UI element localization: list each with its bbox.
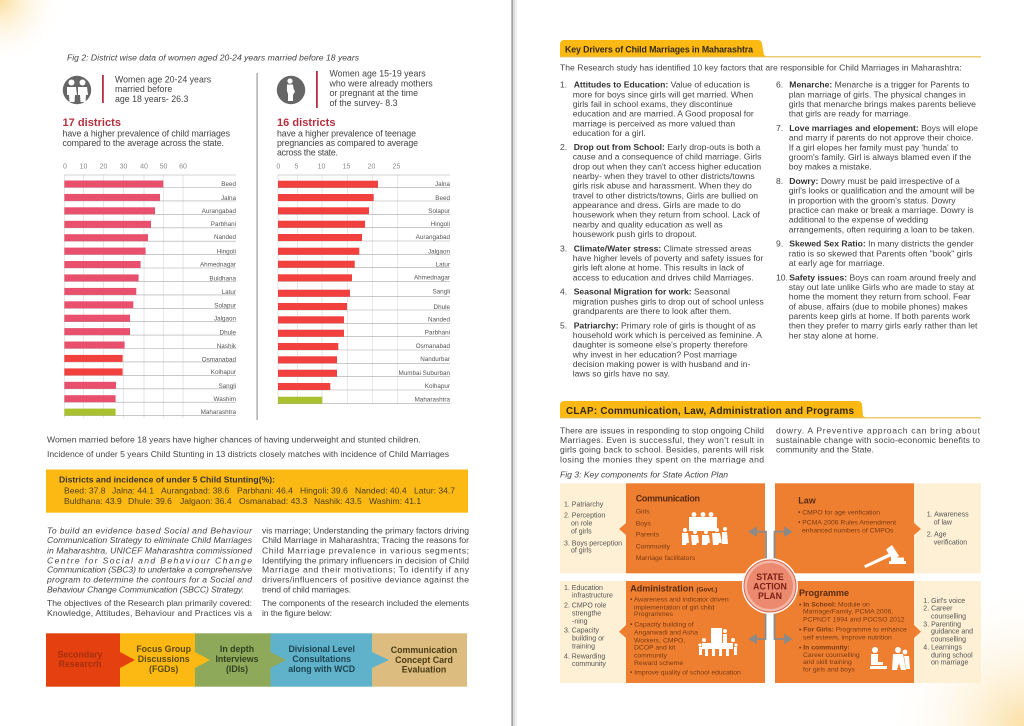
step: divisional consultations: along with WCD bbox=[288, 664, 355, 674]
list: key drivers 1-5: girls risk abuse and harassment. When they do bbox=[573, 181, 752, 191]
list: key drivers 1-5: education for a girl. bbox=[573, 128, 646, 138]
list: key drivers 6-10: 6. bbox=[776, 80, 783, 90]
callout: stunting by district: Nanded: 40.4 bbox=[355, 485, 407, 495]
panel: administration: Reward scheme bbox=[634, 660, 683, 667]
bar chart: child marriage by district: Maharashtra bbox=[201, 409, 236, 416]
list: key drivers 1-5: grandparents are there to look after them. bbox=[573, 306, 731, 316]
panel: programme: 2. Career bbox=[923, 606, 953, 613]
list: key drivers 1-5: more for boys since girls will get married. When bbox=[573, 89, 753, 99]
badge: state action plan: ACTION bbox=[753, 582, 787, 592]
step: divisional consultations: Consultations bbox=[292, 654, 351, 664]
bar chart: child marriage by district: Washim bbox=[213, 396, 236, 403]
bar chart: teenage pregnancy by district: Ahmednagar bbox=[414, 274, 450, 282]
process flow: research components bbox=[46, 633, 467, 687]
badge: state action plan: STATE bbox=[756, 572, 784, 582]
text block: CLAP intro right: sustainable change with socio-economic benefits to bbox=[776, 435, 980, 445]
list: key drivers 6-10: girls that menarche brings makes parents believe bbox=[789, 99, 976, 109]
panel: programme: • In School: Module on bbox=[799, 602, 870, 609]
panel: law: Law bbox=[798, 495, 817, 505]
intro text: key factors: The Research study has identified 10 key factors that are responsible for Child Marriages in Maharashtra: bbox=[560, 62, 962, 72]
text block: CLAP intro left: losing the monies they spent on the marriage and bbox=[560, 454, 764, 464]
list: key drivers 1-5: education and are married. A Good proposal for bbox=[573, 109, 754, 119]
list: key drivers 6-10: parents keep girls at home. If both parents work bbox=[789, 311, 971, 321]
list: key drivers 6-10: Menarche: Menarche is a trigger for Parents to bbox=[789, 80, 970, 90]
panel: law: • CMPO for age verification bbox=[798, 510, 880, 517]
bar chart: teenage pregnancy by district: Parbhani bbox=[425, 330, 450, 336]
bar chart: child marriage by district: Latur bbox=[222, 289, 236, 296]
bar chart: child marriage by district: Aurangabad bbox=[202, 208, 236, 215]
text block: research strategy right column: Child Marriage prevalence in various segments; bbox=[262, 545, 469, 555]
text block: research strategy left column: The objectives of the Research plan primarily covered: bbox=[47, 598, 252, 608]
stat block: teenage mothers: who were already mothers bbox=[328, 79, 433, 89]
panel: administration: building or bbox=[572, 635, 605, 642]
panel: administration: 2. CMPO role bbox=[564, 603, 607, 610]
bar chart: child marriage by district: Hingoli bbox=[217, 248, 236, 256]
panel: programme: on marriage bbox=[931, 660, 968, 667]
panel: programme: counselling bbox=[931, 637, 966, 644]
list: key drivers 6-10: boy makes a mistake. bbox=[789, 162, 872, 172]
list: key drivers 6-10: 8. bbox=[776, 176, 783, 186]
panel: administration: infrastructure bbox=[572, 593, 613, 600]
list: key drivers 6-10: 7. bbox=[776, 123, 783, 133]
text block: research strategy left column bbox=[46, 525, 253, 618]
bar chart: teenage pregnancy by district: Kolhapur bbox=[425, 383, 450, 390]
bar chart: teenage pregnancy by district: 0 bbox=[276, 164, 280, 171]
text block: CLAP intro right: community and the State. bbox=[776, 445, 874, 455]
text block: research strategy right column: Marriage and their motivations; To identify if any bbox=[262, 565, 470, 575]
text block: CLAP intro left: There are issues in responding to stop ongoing Child bbox=[560, 425, 764, 435]
bar chart: teenage pregnancy by district: Hingoli bbox=[431, 221, 450, 228]
step: concept card evaluation: Communication bbox=[391, 645, 457, 655]
panel: programme: and skill training bbox=[803, 659, 852, 666]
bar chart: teenage pregnancy by district: 15 bbox=[343, 164, 350, 171]
icon: gavel bbox=[864, 545, 906, 568]
panel: programme: self esteem, improve nutrition bbox=[803, 634, 892, 641]
list: key drivers 1-5: 2. bbox=[560, 142, 567, 152]
bar chart: teenage pregnancy by district: Aurangabad bbox=[416, 234, 450, 241]
bar chart: teenage pregnancy by district bbox=[276, 164, 450, 404]
heading: 17 districts: have a higher prevalence of child marriages bbox=[62, 129, 231, 139]
bar chart: teenage pregnancy by district: Beed bbox=[435, 195, 450, 202]
text block: research strategy right column bbox=[262, 525, 470, 618]
step: in depth interviews: (IDIs) bbox=[226, 664, 248, 674]
text block: research strategy right column: The components of the research included the elements bbox=[262, 598, 469, 608]
list: key drivers 1-5: cause and a consequence of child marriage. Girls bbox=[573, 152, 761, 162]
panel: programme: counselling bbox=[931, 613, 966, 620]
list: key drivers 1-5: girls left alone at home. This results in lack of bbox=[573, 263, 745, 273]
panel: administration: Anganwadi and Asha bbox=[634, 630, 698, 637]
text block: research strategy left column: Communication Strategy to eliminate Child Marriages bbox=[47, 535, 253, 545]
list: key drivers 1-5: appearance and dress. Girls are made to do bbox=[573, 200, 741, 210]
panel: law: verification bbox=[934, 540, 967, 547]
text block: research strategy left column: Communication (SBC3) to undertake a comprehensive bbox=[47, 565, 252, 575]
text block: research strategy left column: Knowledge, Attitudes, Behaviour and Practices vis a bbox=[47, 608, 252, 618]
panel: programme: Career counselling bbox=[803, 652, 860, 659]
text block: research strategy left column: in Maharashtra, UNICEF Maharashtra commissioned bbox=[47, 545, 252, 555]
list: key drivers 6-10: plan marriage of girls. The physical changes in bbox=[789, 89, 966, 99]
panel: administration: DCOP and kit bbox=[634, 645, 676, 652]
stat block: women married before 18: married before bbox=[115, 84, 172, 94]
panel: communication: Marriage facilitators bbox=[636, 555, 696, 562]
list: key drivers 1-5: daughter is someone else's property therefore bbox=[573, 340, 748, 350]
bar chart: teenage pregnancy by district: Sangli bbox=[432, 288, 450, 296]
icon: administration meeting bbox=[698, 628, 738, 656]
panel: administration: Programmes bbox=[634, 611, 674, 618]
callout: stunting by district: Parbhani: 46.4 bbox=[237, 485, 293, 495]
bar chart: child marriage by district: Parbhani bbox=[211, 221, 236, 228]
list: key drivers 1-5: laws so girls have no say. bbox=[573, 369, 670, 379]
text block: research strategy left column: Behaviour Change Communication (SBCC) Strategy. bbox=[47, 584, 244, 594]
list: key drivers 1-5: Attitudes to Education: Value of education is bbox=[574, 80, 750, 90]
text block: CLAP intro left bbox=[560, 425, 765, 464]
list: key drivers 6-10: 9. bbox=[776, 239, 783, 249]
list: key drivers 6-10: and marry if parents do not approve their choice. bbox=[789, 133, 974, 143]
heading: 16 districts: 16 districts bbox=[277, 117, 336, 129]
bar chart: teenage pregnancy by district: 25 bbox=[393, 164, 400, 171]
callout: stunting by district: Jalna: 44.1 bbox=[112, 485, 154, 495]
panel: programme: during school bbox=[931, 652, 973, 659]
panel: programme: • In community: bbox=[799, 644, 850, 651]
step: secondary research bbox=[58, 650, 103, 669]
bar chart: child marriage by district: Kolhapur bbox=[211, 369, 236, 376]
callout: stunting by district bbox=[46, 470, 468, 513]
icon: training group bbox=[870, 647, 910, 670]
bar chart: teenage pregnancy by district: 5 bbox=[295, 164, 299, 171]
panel: communication: on role bbox=[571, 520, 593, 528]
panel: communication: Parents bbox=[636, 532, 660, 539]
list: key drivers 6-10: of abuse, affairs (due to mobile phones) makes bbox=[789, 301, 968, 311]
panel: law bbox=[775, 483, 981, 573]
bar chart: child marriage by district: 10 bbox=[80, 164, 87, 171]
badge: state action plan bbox=[742, 558, 798, 614]
panel: administration: implementation of girl child bbox=[634, 605, 715, 612]
panel: communication: of girls bbox=[571, 548, 592, 555]
panel: administration: • Awareness and indicator driven bbox=[630, 597, 729, 604]
panel: administration bbox=[560, 581, 765, 683]
heading: 16 districts: have a higher prevalence of teenage bbox=[277, 129, 416, 139]
list: key drivers 6-10: arrangements, often requiring a loan to be taken. bbox=[789, 224, 975, 234]
stat block: women married before 18: Women age 20-24 years bbox=[115, 75, 212, 85]
list: key drivers 1-5: migration pushes girls to drop out of school unless bbox=[573, 296, 764, 306]
panel: programme: 1. Girl's voice bbox=[923, 598, 965, 605]
text block: research strategy right column: drivers/influencers of positive deviance against the bbox=[262, 575, 469, 585]
bar chart: child marriage by district: Nashik bbox=[217, 343, 237, 350]
panel: communication: Girls bbox=[636, 509, 650, 516]
section tab: key drivers bbox=[560, 40, 981, 57]
text block: stunting statement bbox=[47, 434, 449, 459]
heading: 16 districts bbox=[277, 117, 418, 158]
bar chart: child marriage by district: Buldhana bbox=[209, 276, 236, 282]
bar chart: child marriage by district: 30 bbox=[120, 164, 127, 171]
panel: communication: 3. Boys perception bbox=[564, 540, 622, 547]
icon: pregnant girl bbox=[277, 76, 305, 104]
list: key drivers 1-5: girls fail in school exams, they discontinue bbox=[573, 99, 733, 109]
step: focus group discussions bbox=[136, 644, 192, 674]
list: key drivers 6-10: ratio is so skewed that Parents often "book" girls bbox=[789, 248, 972, 258]
heading: 17 districts: 17 districts bbox=[62, 117, 121, 129]
heading: 17 districts bbox=[62, 117, 231, 148]
list: key drivers 1-5: have higher levels of poverty and safety issues for bbox=[573, 253, 763, 263]
list: key drivers 6-10: groom's family. Girl is always blamed even if the bbox=[789, 152, 971, 162]
panel: communication: Boys bbox=[636, 520, 651, 527]
panel: administration: Workers, CMPO, bbox=[634, 637, 685, 644]
bar chart: teenage pregnancy by district: Maharashtra bbox=[415, 396, 450, 404]
bar chart: child marriage by district: 40 bbox=[140, 164, 148, 171]
callout: stunting by district: Districts and incidence of under 5 Child Stunting(%): bbox=[59, 475, 275, 485]
list: key drivers 1-5: Patriarchy: Primary role of girls is thought of as bbox=[574, 320, 756, 330]
text block: CLAP intro right bbox=[776, 425, 981, 455]
panel: programme: guidance and bbox=[931, 629, 973, 636]
panel: communication: of girls bbox=[571, 529, 592, 536]
list: key drivers 6-10: then they prefer to marry girls early rather than let bbox=[789, 321, 978, 331]
bar chart: child marriage by district: 50 bbox=[160, 164, 167, 171]
panel: administration: strengthe bbox=[572, 610, 601, 617]
list: key drivers 1-5: 3. bbox=[560, 243, 567, 253]
panel: law: of law bbox=[934, 519, 953, 526]
text block: CLAP intro right: dowry. A Preventive approach can bring about bbox=[776, 425, 981, 435]
list: key drivers 6-10: stay out late unlike Girls who are made to stay at bbox=[789, 282, 975, 292]
panel: communication: 2. Perception bbox=[564, 513, 605, 520]
bar chart: child marriage by district: 20 bbox=[100, 164, 107, 171]
list: key drivers 6-10: at early age for marriage. bbox=[789, 258, 885, 268]
step: concept card evaluation bbox=[391, 645, 457, 674]
list: key drivers 6-10: that girls are ready for marriage. bbox=[789, 109, 911, 119]
list: key drivers 1-5: 5. bbox=[560, 320, 567, 330]
panel: programme: 3. Parenting bbox=[923, 621, 961, 628]
list: key drivers 1-5: 4. bbox=[560, 287, 567, 297]
callout: stunting by district: Dhule: 39.6 bbox=[128, 496, 172, 506]
list: key drivers 1-5: drop out when they can't access higher education bbox=[573, 161, 761, 171]
list: key drivers 1-5: why invest in her education? Post marriage bbox=[572, 349, 737, 359]
bar chart: child marriage by district: Nanded bbox=[214, 234, 236, 241]
list: key drivers 6-10: Love marriages and elopement: Boys will elope bbox=[789, 123, 978, 133]
bar chart: teenage pregnancy by district: Solapur bbox=[428, 208, 450, 215]
panel: administration: -ning bbox=[572, 618, 588, 625]
list: key drivers 1-5: Seasonal Migration for work: Seasonal bbox=[574, 287, 730, 297]
panel: law: • PCMA 2006 Rules Amendment bbox=[798, 520, 896, 527]
list: key drivers 6-10: additional to the expense of wedding bbox=[789, 215, 928, 225]
figure caption: Fig 3: Fig 3: Key components for State Action Plan bbox=[560, 470, 728, 480]
callout: stunting by district: Latur: 34.7 bbox=[414, 485, 455, 495]
panel: programme: PCPNDT 1994 and POCSO 2012 bbox=[803, 617, 905, 624]
list: key drivers 6-10: Skewed Sex Ratio: In many districts the gender bbox=[789, 239, 974, 249]
step: in depth interviews: In depth bbox=[220, 644, 254, 654]
step: in depth interviews bbox=[215, 644, 259, 674]
list: key drivers 6-10: If a girl elopes her family must pay 'hunda' to bbox=[789, 142, 958, 152]
step: concept card evaluation: Evaluation bbox=[402, 664, 446, 674]
list: key drivers 1-5: access to education and drives child Marriages. bbox=[573, 272, 754, 282]
step: secondary research: Researcrh bbox=[58, 659, 102, 669]
step: divisional consultations bbox=[288, 644, 355, 674]
panel: programme: Marriage/Family, PCMA 2006, bbox=[803, 609, 893, 616]
step: focus group discussions: (FGDs) bbox=[149, 664, 178, 674]
bar chart: teenage pregnancy by district: Nanded bbox=[428, 316, 450, 324]
panel: programme: • For Girls: Programme to enhance bbox=[799, 627, 907, 634]
callout: stunting by district: Beed: 37.8 bbox=[64, 485, 106, 495]
list: key drivers 6-10: home the moment they return from school. Fear bbox=[789, 292, 971, 302]
list: key drivers 6-10: 10. bbox=[776, 272, 788, 282]
badge: state action plan: PLAN bbox=[758, 591, 782, 601]
panel: administration: community bbox=[572, 661, 606, 668]
step: secondary research: Secondary bbox=[58, 650, 103, 660]
list: key drivers 1-5: decision making power is with husband and in- bbox=[573, 359, 751, 369]
text block: research strategy left column: To build an evidence based Social and Behaviour bbox=[47, 525, 253, 535]
panel: programme bbox=[775, 581, 981, 683]
panel: programme: for girls and boys bbox=[803, 666, 855, 673]
section tab: key drivers: Key Drivers of Child Marriages in Maharashtra bbox=[565, 44, 753, 54]
text block: research strategy right column: vis marriage; Understanding the primary factors driving bbox=[262, 525, 469, 535]
callout: stunting by district: Hingoli: 39.6 bbox=[300, 485, 348, 495]
panel: communication: 1. Patriarchy bbox=[564, 501, 604, 508]
icon: meeting group bbox=[682, 512, 728, 545]
bar chart: child marriage by district: Solapur bbox=[214, 302, 236, 310]
bar chart: child marriage by district: Jalna bbox=[221, 195, 236, 202]
stat block: teenage mothers bbox=[277, 69, 433, 108]
list: key drivers 1-5: nearby and quality education as well as bbox=[573, 219, 723, 229]
panel: law: enhanced numbers of CMPOs bbox=[802, 528, 894, 535]
panel: communication bbox=[560, 483, 765, 573]
step: focus group discussions: Focus Group bbox=[136, 644, 192, 654]
callout: stunting by district: Jalgaon: 36.4 bbox=[180, 496, 232, 506]
stat block: teenage mothers: of the survey- 8.3 bbox=[330, 98, 398, 108]
bar chart: child marriage by district: 60 bbox=[179, 164, 187, 171]
step: concept card evaluation: Concept Card bbox=[395, 655, 453, 665]
list: key drivers 1-5 bbox=[560, 80, 764, 379]
list: key drivers 6-10 bbox=[776, 80, 978, 340]
text block: stunting statement: Women married before 18 years have higher chances of having underweight and stunted children. bbox=[47, 434, 421, 444]
bar chart: child marriage by district: Jalgaon bbox=[214, 316, 236, 322]
callout: stunting by district: Osmanabad: 43.3 bbox=[239, 496, 308, 506]
text block: research strategy right column: trend of child marriages. bbox=[262, 584, 351, 594]
list: key drivers 6-10: in proportion with the groom's status. Dowry bbox=[789, 195, 956, 205]
text block: CLAP intro left: Marriages. Even is successful, they won't result in bbox=[560, 435, 764, 445]
step: divisional consultations: Divisional Level bbox=[288, 644, 355, 654]
callout: stunting by district: Buldhana: 43.9 bbox=[64, 496, 122, 506]
bar chart: teenage pregnancy by district: Nandurbar bbox=[420, 356, 450, 363]
bar chart: teenage pregnancy by district: Mumbai Suburban bbox=[399, 370, 450, 377]
list: key drivers 1-5: travel to other districts/towns, Girls are bullied on bbox=[573, 190, 758, 200]
bar chart: child marriage by district bbox=[63, 164, 237, 418]
bar chart: child marriage by district: Beed bbox=[221, 181, 236, 188]
callout: stunting by district: Aurangabad: 38.6 bbox=[161, 485, 230, 495]
list: key drivers 1-5: household work which is perceived as feminine. A bbox=[573, 330, 762, 340]
panel: programme: 4. Learnings bbox=[923, 644, 962, 651]
section tab: CLAP bbox=[560, 401, 981, 418]
bar chart: teenage pregnancy by district: 10 bbox=[318, 164, 325, 171]
panel: communication: Community bbox=[636, 543, 671, 550]
bar chart: child marriage by district: Sangli bbox=[218, 383, 236, 390]
stat block: women married before 18: age 18 years- 26.3 bbox=[115, 94, 188, 104]
diagram: state action plan bbox=[560, 483, 981, 683]
bar chart: teenage pregnancy by district: 20 bbox=[368, 164, 375, 171]
panel: administration: training bbox=[572, 644, 595, 651]
bar chart: teenage pregnancy by district: Dhule bbox=[434, 304, 450, 311]
text block: research strategy right column: in the figure below: bbox=[262, 608, 332, 618]
text block: stunting statement: Incidence of under 5 years Child Stunting in 13 districts closely matches with incidence of Child Marriages bbox=[47, 449, 449, 459]
stat block: teenage mothers: Women age 15-19 years bbox=[330, 69, 426, 79]
bar chart: teenage pregnancy by district: Osmanabad bbox=[416, 343, 450, 350]
bar chart: child marriage by district: Osmanabad bbox=[202, 356, 236, 364]
text block: CLAP intro left: girls going back to school. Besides, parents will risk bbox=[560, 445, 765, 455]
list: key drivers 6-10: her stay alone at home. bbox=[789, 330, 879, 340]
panel: law: 2. Age bbox=[927, 532, 947, 539]
heading: 16 districts: pregnancies as compared to average bbox=[277, 138, 418, 148]
stat block: teenage mothers: or pregnant at the time bbox=[330, 88, 418, 98]
panel: administration: • Improve quality of school education bbox=[630, 669, 741, 676]
panel: administration: • Capacity building of bbox=[630, 621, 694, 628]
callout: stunting by district: Nashik: 43.5 bbox=[314, 496, 362, 506]
section tab: CLAP: CLAP: Communication, Law, Administration and Programs bbox=[566, 406, 854, 417]
list: key drivers 1-5: housework push girls to dropout. bbox=[573, 229, 697, 239]
text block: research strategy left column: Centre for Social and Behaviour Change bbox=[47, 555, 252, 565]
list: key drivers 6-10: Dowry: Dowry must be paid irrespective of a bbox=[789, 176, 960, 186]
arrows: centre to panels bbox=[750, 528, 791, 643]
panel: administration: Administration (Govt.) bbox=[630, 583, 717, 593]
list: key drivers 6-10: girl's looks or qualification and the amount will be bbox=[789, 186, 975, 196]
bar chart: teenage pregnancy by district: Latur bbox=[436, 262, 450, 268]
callout: stunting by district: Washim: 41.1 bbox=[369, 496, 421, 506]
list: key drivers 1-5: 1. bbox=[560, 80, 567, 90]
panel: communication: Communication bbox=[636, 494, 700, 504]
step: in depth interviews: Interviews bbox=[215, 654, 259, 664]
bar chart: teenage pregnancy by district: Jalgaon bbox=[428, 248, 450, 256]
panel: administration: 3. Capacity bbox=[564, 628, 600, 635]
bar chart: child marriage by district: Ahmednagar bbox=[200, 262, 236, 268]
heading: 17 districts: compared to the average across the state. bbox=[62, 138, 224, 148]
list: key drivers 1-5: Climate/Water stress: Climate stressed areas bbox=[574, 243, 752, 253]
bar chart: teenage pregnancy by district: Jalna bbox=[435, 181, 450, 188]
panel: programme: Programme bbox=[799, 588, 849, 598]
panel: administration: 4. Rewarding bbox=[564, 654, 605, 661]
bar chart: child marriage by district: 0 bbox=[63, 164, 67, 171]
panel: law: 1. Awareness bbox=[927, 512, 969, 519]
heading: 16 districts: across the state. bbox=[277, 148, 338, 158]
icon: two girls bbox=[63, 76, 91, 104]
step: focus group discussions: Discussions bbox=[138, 654, 190, 664]
list: key drivers 6-10: practice can make or break a marriage. Dowry is bbox=[789, 205, 974, 215]
text block: research strategy right column: Identifying the primary influencers in decision of Child bbox=[262, 555, 469, 565]
list: key drivers 1-5: housework when they return from school. Lack of bbox=[573, 210, 761, 220]
text block: research strategy right column: Child Marriage in Maharashtra; Tracing the reasons for bbox=[262, 535, 469, 545]
text block: research strategy left column: program to determine the contours for a Social and bbox=[46, 575, 252, 585]
list: key drivers 6-10: Safety issues: Boys can roam around freely and bbox=[789, 272, 976, 282]
list: key drivers 1-5: marriage is perceived as more valued than bbox=[573, 118, 735, 128]
divider between charts bbox=[256, 73, 258, 420]
figure caption: Fig 2: Fig 2: District wise data of women aged 20-24 years married before 18 years bbox=[67, 53, 360, 63]
bar chart: child marriage by district: Dhule bbox=[220, 330, 236, 336]
panel: administration: 1. Education bbox=[564, 585, 603, 592]
list: key drivers 1-5: nearby- when they travel to other districts/towns bbox=[573, 171, 755, 181]
list: key drivers 1-5: Drop out from School: Early drop-outs is both a bbox=[574, 142, 761, 152]
panel: administration: community bbox=[634, 652, 667, 659]
stat block: women married before 18 bbox=[63, 75, 212, 104]
